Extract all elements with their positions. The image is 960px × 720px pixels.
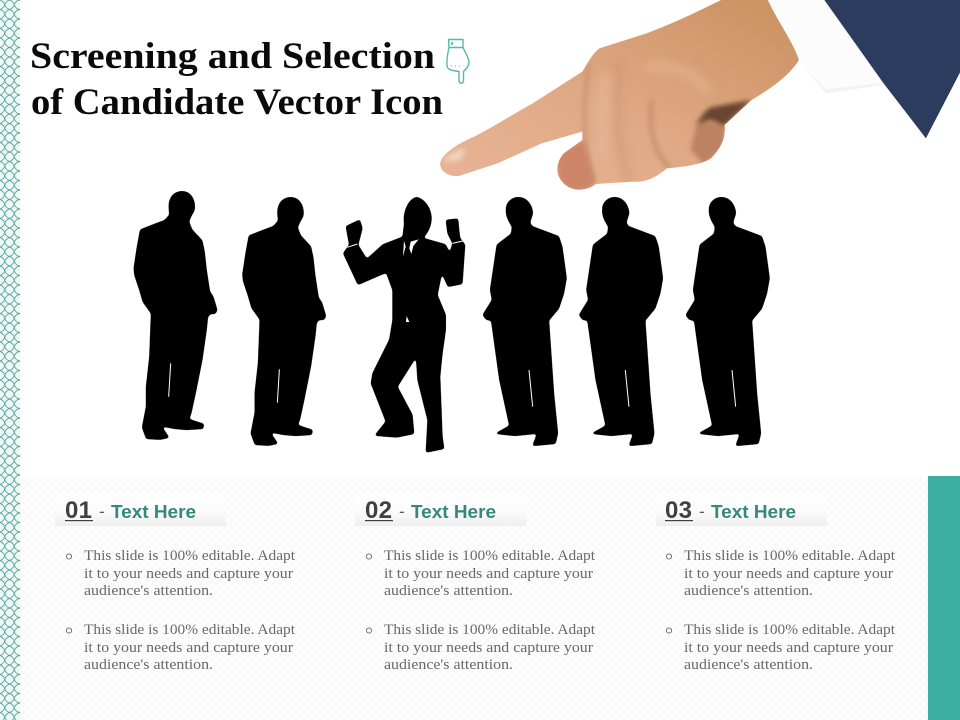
figure: cheering silhouette xyxy=(344,198,464,452)
heading: 03 Text Here: 03 xyxy=(665,497,692,524)
background pattern strip xyxy=(0,0,20,720)
heading: 01 Text Here: Text Here xyxy=(111,502,196,522)
text block: bullets: it to your needs and capture your xyxy=(384,640,593,656)
photo: hand pointing from suit sleeve xyxy=(440,0,960,192)
text block: bullets xyxy=(666,548,895,673)
title xyxy=(30,36,443,123)
text block: bullets: it to your needs and capture your xyxy=(684,640,893,656)
text block: bullets: audience's attention. xyxy=(84,657,213,673)
heading: 03 Text Here xyxy=(656,494,827,526)
sleeve xyxy=(824,0,960,138)
text block: bullets xyxy=(66,548,295,673)
figure: silhouette 6 xyxy=(686,198,769,445)
heading: 03 Text Here: Text Here xyxy=(711,502,796,522)
text block: bullets: audience's attention. xyxy=(84,583,213,599)
text block: bullets: This slide is 100% editable. Adapt xyxy=(384,622,595,638)
icon: pointing hand outline xyxy=(447,40,469,83)
text block: bullets: it to your needs and capture your xyxy=(384,566,593,582)
panel: bottom text area background xyxy=(20,478,928,720)
figure: silhouette 2 xyxy=(243,198,325,445)
heading: 01 Text Here: - xyxy=(99,502,105,521)
title: Screening and Selection xyxy=(30,36,435,77)
figure: silhouette 5 xyxy=(580,198,662,445)
text block: bullets: This slide is 100% editable. Adapt xyxy=(84,548,295,564)
heading: 02 Text Here xyxy=(355,494,526,526)
text block: bullets: This slide is 100% editable. Adapt xyxy=(84,622,295,638)
heading: 02 Text Here: - xyxy=(399,502,405,521)
text block: bullets: This slide is 100% editable. Adapt xyxy=(384,548,595,564)
shirt and tie detail xyxy=(403,239,419,257)
heading: 01 Text Here: 01 xyxy=(65,497,92,524)
panel: column 03 xyxy=(656,494,895,673)
teal side block xyxy=(928,476,960,720)
heading: 02 Text Here: Text Here xyxy=(411,502,496,522)
text block: bullets: This slide is 100% editable. Adapt xyxy=(684,548,895,564)
text block: bullets: audience's attention. xyxy=(384,657,513,673)
heading: 01 Text Here xyxy=(55,494,226,526)
text block: bullets xyxy=(366,548,595,673)
text block: bullets: This slide is 100% editable. Adapt xyxy=(684,622,895,638)
shirt cuff xyxy=(768,0,884,93)
figure: silhouette 1 xyxy=(134,192,217,439)
heading: 02 Text Here: 02 xyxy=(365,497,392,524)
text block: bullets: audience's attention. xyxy=(384,583,513,599)
text block: bullets: audience's attention. xyxy=(684,657,813,673)
text block: bullets: it to your needs and capture your xyxy=(84,566,293,582)
text block: bullets: audience's attention. xyxy=(684,583,813,599)
heading: 03 Text Here: - xyxy=(699,502,705,521)
text block: bullets: it to your needs and capture your xyxy=(684,566,893,582)
text block: bullets: it to your needs and capture your xyxy=(84,640,293,656)
panel: column 02 xyxy=(355,494,595,673)
hand shading xyxy=(444,60,752,192)
hand skin xyxy=(440,0,799,190)
figure: silhouette 4 xyxy=(483,198,566,445)
title: of Candidate Vector Icon xyxy=(31,82,443,123)
panel: column 01 xyxy=(55,494,295,673)
